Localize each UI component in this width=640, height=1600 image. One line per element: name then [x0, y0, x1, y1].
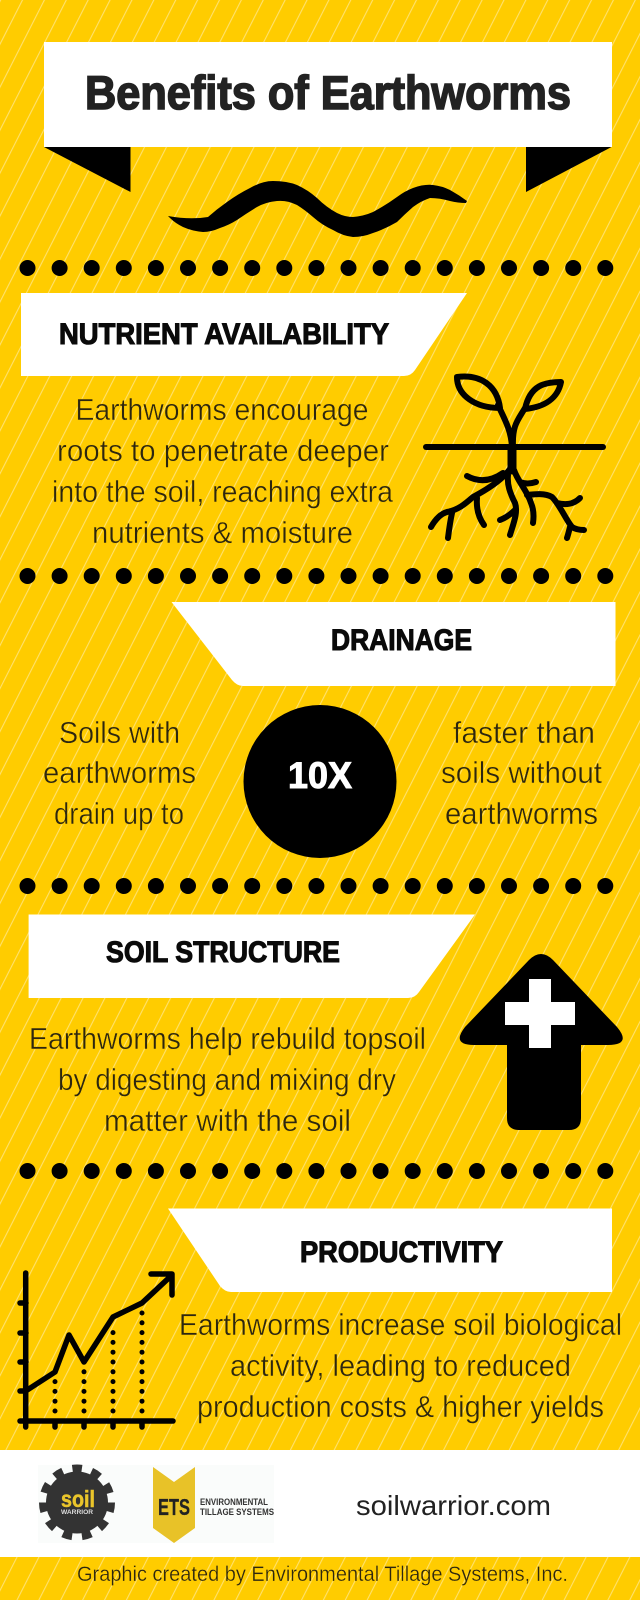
panel: nutrient availability: NUTRIENT AVAILABILITY: [59, 318, 389, 351]
logo: soil warrior gear: WARRIOR: [61, 1509, 93, 1516]
panel: nutrient availability: [21, 293, 467, 376]
text: productivity: production costs & higher yields: [197, 1389, 604, 1424]
text: drainage left: Soils with: [59, 715, 180, 750]
text: productivity: [179, 1307, 622, 1424]
icon: plant with roots: [426, 377, 603, 538]
text: drainage right: [441, 715, 602, 831]
text: soil structure: [29, 1021, 426, 1138]
footer band: [0, 1450, 640, 1557]
divider dots 3: [20, 878, 613, 894]
text: drainage left: drain up to: [54, 796, 184, 831]
text: drainage right: soils without: [441, 755, 602, 790]
website address: soilwarrior.com: [356, 1490, 551, 1521]
text: soil structure: Earthworms help rebuild topsoil: [29, 1021, 426, 1056]
divider dots 4: [20, 1163, 613, 1179]
text: productivity: activity, leading to reduced: [230, 1348, 571, 1383]
text: soil structure: matter with the soil: [104, 1103, 351, 1138]
text: drainage right: faster than: [453, 715, 595, 750]
text: nutrient availability: into the soil, reaching extra: [52, 474, 394, 509]
logo: soil warrior gear: [43, 1468, 111, 1536]
logo: ETS shield: TILLAGE SYSTEMS: [200, 1507, 274, 1518]
panel: soil structure: [29, 914, 475, 998]
text: soil structure: by digesting and mixing dry: [58, 1062, 396, 1097]
panel: soil structure: SOIL STRUCTURE: [106, 936, 340, 969]
divider dots 2: [20, 568, 613, 584]
title banner: [44, 42, 612, 192]
callout: 10X circle: 10X: [288, 755, 352, 796]
credit line: Graphic created by Environmental Tillage Systems, Inc.: [77, 1563, 568, 1586]
title banner: Benefits of Earthworms: [85, 66, 571, 119]
panel: productivity: PRODUCTIVITY: [300, 1236, 503, 1269]
text: nutrient availability: roots to penetrate deeper: [57, 433, 389, 468]
panel: drainage: [172, 602, 616, 686]
divider dots 1: [20, 260, 613, 276]
icon: earthworm: [168, 181, 467, 237]
icon: rising line chart: [20, 1273, 173, 1427]
text: nutrient availability: [52, 392, 394, 550]
panel: productivity: [168, 1208, 612, 1292]
text: drainage left: earthworms: [43, 755, 196, 790]
text: drainage right: earthworms: [445, 796, 598, 831]
callout: 10X circle: [244, 705, 396, 858]
logo: ETS shield: ENVIRONMENTAL: [200, 1497, 268, 1507]
logo: ETS shield: [153, 1467, 274, 1543]
text: nutrient availability: Earthworms encourage: [76, 392, 368, 427]
text: nutrient availability: nutrients & moisture: [92, 515, 353, 550]
icon: up arrow with plus: [460, 954, 623, 1130]
logo panel: [38, 1465, 274, 1543]
logo: soil warrior gear: soil: [61, 1486, 95, 1512]
panel: drainage: DRAINAGE: [331, 624, 472, 657]
text: drainage left: [43, 715, 196, 831]
logo: ETS shield: ETS: [158, 1494, 190, 1520]
